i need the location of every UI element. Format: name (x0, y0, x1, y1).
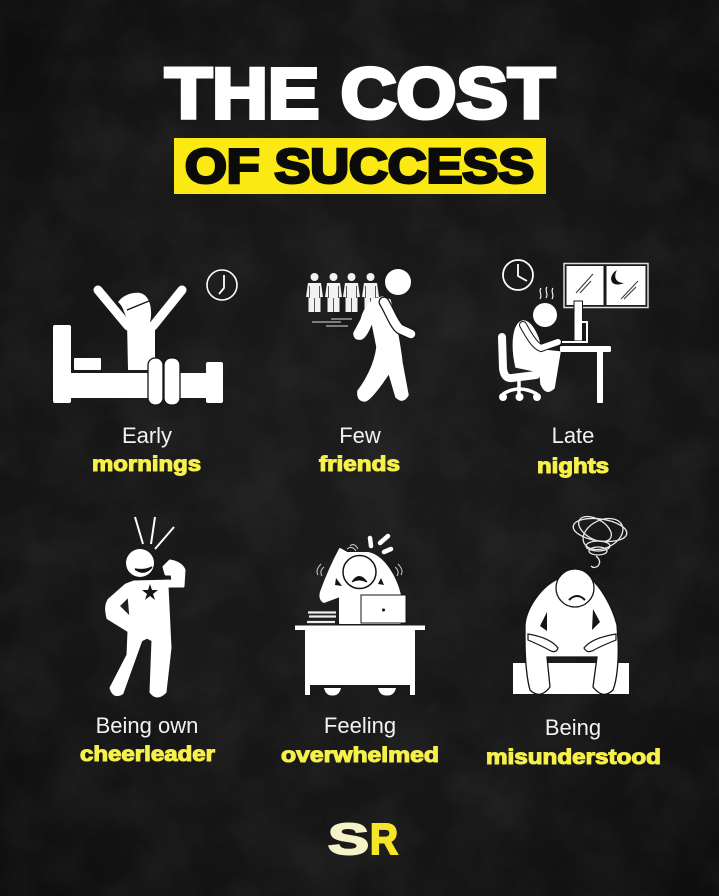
panel: being own cheerleader (80, 517, 215, 766)
label: late nights: Late (552, 423, 594, 448)
label: being misunderstood: Being (545, 715, 601, 740)
logo: SR (328, 815, 398, 864)
label: feeling overwhelmed: Feeling (324, 713, 396, 738)
icon: desk (295, 626, 425, 696)
panel: few friends (306, 269, 411, 476)
icon: sad person sitting (513, 511, 629, 694)
label: being misunderstood (486, 715, 661, 769)
panel: being misunderstood (486, 511, 661, 769)
label: early mornings: mornings (92, 453, 201, 476)
label: early mornings (92, 423, 201, 476)
panel: early mornings (53, 270, 237, 476)
label: feeling overwhelmed (281, 713, 439, 767)
icon: person walking away from friends (306, 269, 411, 401)
icon: clock (503, 260, 533, 290)
title (165, 55, 555, 194)
icon: tangled scribble (572, 511, 628, 568)
panel: feeling overwhelmed (281, 536, 439, 767)
icon: working late at a desk (499, 260, 648, 403)
label: few friends: Few (339, 423, 381, 448)
icon: person patting own back (107, 517, 184, 696)
icon: clock (207, 270, 237, 300)
logo: SR: R (370, 815, 398, 864)
icon: office chair (499, 337, 541, 401)
icon: night window (564, 264, 648, 308)
panel: late nights (499, 260, 648, 478)
group of four friends (306, 273, 379, 312)
logo: SR: S (328, 815, 369, 864)
label: early mornings: Early (122, 423, 172, 448)
label: being own cheerleader: Being own (96, 713, 198, 738)
icon: waking up in bed (53, 270, 237, 405)
highlighted subtitle: OF SUCCESS: OF SUCCESS (185, 140, 534, 194)
label: being own cheerleader: cheerleader (80, 743, 215, 766)
icon: laptop (361, 595, 406, 623)
label: late nights (537, 423, 609, 478)
label: being own cheerleader (80, 713, 215, 766)
label: feeling overwhelmed: overwhelmed (281, 744, 439, 767)
label: being misunderstood: misunderstood (486, 746, 661, 769)
label: few friends (319, 423, 400, 476)
label: few friends: friends (319, 453, 400, 476)
icon: stressed person at a desk (295, 536, 425, 696)
title line: THE COST: THE COST (165, 55, 555, 134)
label: late nights: nights (537, 455, 609, 478)
